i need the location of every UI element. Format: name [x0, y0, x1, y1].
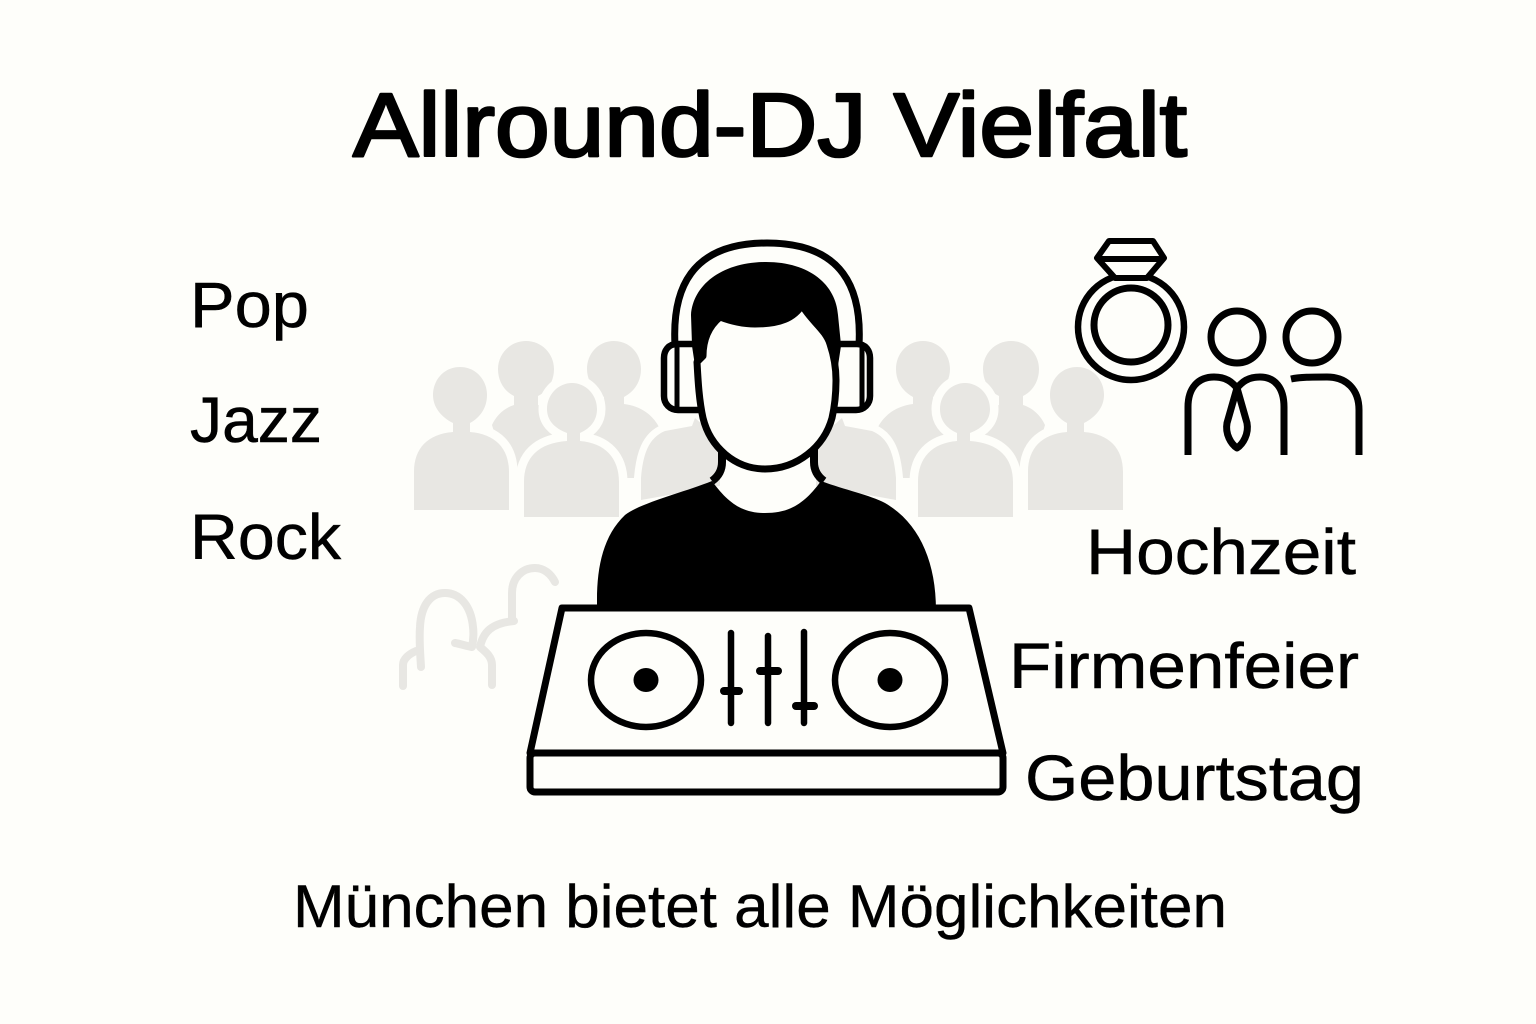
left turntable	[591, 633, 701, 727]
faded figure top	[512, 568, 555, 618]
right ear cup	[828, 344, 870, 410]
person head left	[1211, 311, 1263, 363]
event: Firmenfeier: Firmenfeier	[1009, 630, 1359, 702]
DJ controller	[530, 608, 1003, 792]
ring inner band	[1094, 288, 1168, 362]
fader three	[801, 632, 807, 723]
front person far left	[414, 367, 509, 510]
icon: couple	[1188, 311, 1359, 455]
faded figure far left stub	[403, 651, 416, 686]
ring diamond	[1097, 241, 1164, 278]
fader one knob	[724, 687, 739, 695]
right turntable	[835, 633, 945, 727]
front person behind DJ	[641, 418, 725, 500]
back person left	[492, 341, 590, 480]
partner body	[1291, 377, 1359, 455]
back person inner side	[878, 341, 962, 478]
shirt	[597, 481, 936, 610]
crowd left	[414, 341, 725, 517]
ring outer band	[1078, 274, 1184, 380]
front person centre right	[918, 383, 1013, 517]
faded figure left	[420, 593, 473, 667]
left spindle	[634, 668, 658, 692]
event: Geburtstag: Geburtstag	[1025, 742, 1364, 814]
faded figure right	[480, 621, 514, 685]
person head right	[1286, 311, 1338, 363]
genre: Jazz: Jazz	[190, 384, 322, 456]
footer caption: München bietet alle Möglichkeiten	[293, 873, 1227, 940]
crowd right	[812, 341, 1123, 517]
fader two knob	[760, 667, 778, 675]
fader one	[728, 633, 734, 723]
groom tie	[1227, 388, 1247, 448]
left ear cup	[664, 344, 705, 410]
faders	[724, 632, 814, 723]
genre: Pop: Pop	[190, 269, 309, 341]
fader two	[765, 636, 771, 723]
back person right side	[947, 341, 1045, 480]
right platter	[835, 633, 945, 727]
front person behind DJ right	[812, 418, 896, 500]
hair	[691, 262, 841, 390]
fader three knob	[796, 702, 814, 710]
title: Allround-DJ Vielfalt	[353, 76, 1187, 176]
controller front edge	[530, 753, 1003, 792]
event: Hochzeit: Hochzeit	[1086, 516, 1356, 588]
left platter	[591, 633, 701, 727]
DJ figure	[597, 243, 936, 610]
front person centre	[524, 383, 619, 517]
left cup inner line	[674, 344, 680, 410]
right cup shell	[828, 344, 870, 410]
left cup shell	[664, 344, 705, 410]
right cup inner line	[860, 344, 864, 410]
face	[697, 305, 836, 469]
icon: diamond ring	[1078, 241, 1184, 380]
event list	[1009, 516, 1364, 814]
controller top surface	[530, 608, 1003, 753]
back person right	[575, 341, 659, 478]
genre: Rock: Rock	[190, 501, 342, 573]
neck	[720, 445, 816, 492]
neck lines	[712, 446, 824, 481]
front person far right	[1028, 367, 1123, 510]
faded crowd outlines	[403, 568, 555, 686]
headphone band	[675, 243, 859, 345]
groom body	[1188, 377, 1284, 455]
genre list	[190, 269, 342, 573]
right spindle	[878, 668, 902, 692]
